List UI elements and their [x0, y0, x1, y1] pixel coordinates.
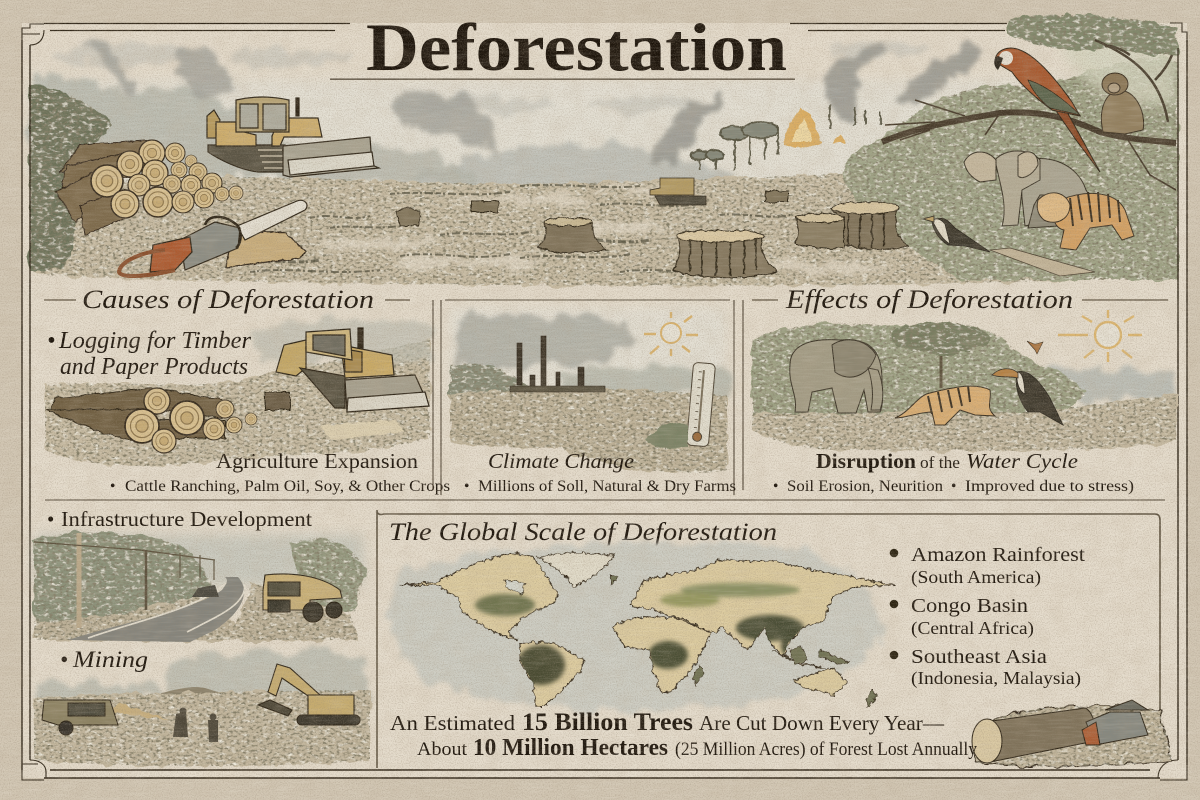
ripper: [207, 110, 220, 138]
arm: [268, 664, 320, 700]
crawler: [297, 715, 360, 725]
stump: centre: [538, 222, 606, 253]
beak: [994, 56, 1003, 70]
haze trees: [290, 143, 480, 182]
climate heading: Climate Change: [488, 449, 634, 473]
macaw on branch: [882, 48, 1176, 190]
tiger: [1037, 192, 1134, 250]
hotspot: congo: (Central Africa): [911, 618, 1034, 639]
hazy quarry wall: [36, 651, 368, 700]
jeep: [42, 700, 118, 735]
bar: [237, 200, 307, 240]
branch: [882, 112, 1176, 143]
butterfly: [1027, 341, 1043, 354]
panel: infrastructure development: [34, 507, 366, 642]
utility poles: [34, 533, 215, 628]
forest cover: [475, 583, 809, 685]
hotspot: congo: Congo Basin: [911, 595, 1028, 617]
climate details: Millions of Soll, Natural & Dry Farms: [478, 478, 736, 495]
burnt tree line: [691, 105, 880, 170]
dark brush scribbles: [230, 185, 790, 273]
scorched ground: [450, 389, 727, 473]
water cycle heading: of the: [920, 453, 960, 472]
bottom border: [44, 770, 1160, 778]
workers: [173, 708, 218, 742]
toucan: [992, 369, 1063, 425]
water cycle heading: Disruption: [816, 449, 916, 473]
corner top-left: [22, 24, 44, 45]
smoke plumes left: [85, 40, 495, 155]
bark lines: [848, 212, 884, 248]
statistic line one: 15 Billion Trees: [522, 709, 693, 736]
right forest: [843, 58, 1178, 280]
road lines: [88, 583, 245, 638]
panel: climate change: [450, 308, 736, 495]
logs: [46, 388, 257, 453]
land masses: [400, 553, 895, 707]
distant hills centre: [380, 143, 760, 190]
smoke plumes centre: [650, 42, 985, 165]
ground tuft: [975, 706, 1172, 766]
continents: [400, 552, 895, 707]
canopy top right: [1008, 15, 1178, 56]
panel: global scale of deforestation: [377, 510, 1172, 768]
wing: [1028, 80, 1080, 115]
blade: [345, 375, 429, 412]
top border left: [44, 24, 350, 30]
water cycle heading: Water Cycle: [966, 449, 1078, 473]
factory: [510, 336, 605, 392]
log pile: [56, 140, 243, 235]
smog: [452, 312, 640, 365]
hudson bay: [505, 580, 525, 595]
wildfire: [784, 108, 846, 147]
ground: [32, 172, 1176, 286]
greenland: [538, 552, 615, 587]
statistic line two: About: [417, 739, 468, 760]
agriculture heading: Agriculture Expansion: [216, 449, 418, 473]
logging scene ground: [45, 340, 430, 466]
log bodies: [46, 388, 225, 443]
hotspot: congo: [890, 595, 1034, 639]
fallen log: [990, 248, 1095, 276]
scrub: [752, 324, 1085, 424]
mining ground: [34, 690, 370, 766]
pale clearing in forest: [1060, 35, 1176, 105]
statistic line two: (25 Million Acres) of Forest Lost Annually: [675, 739, 977, 760]
stump: foreground big: [673, 236, 777, 278]
logging label: •: [47, 328, 55, 354]
heading rules: [44, 299, 410, 301]
bulldozer: [276, 328, 429, 412]
mining label: •: [60, 647, 68, 672]
corner bottom-right: [1158, 760, 1187, 780]
distant bulldozer: [650, 178, 706, 205]
light soil patches: [320, 186, 890, 274]
dump truck: [263, 574, 342, 622]
water cycle details: Soil Erosion, Neurition: [787, 478, 943, 495]
engine: [341, 345, 394, 378]
section rules: [45, 300, 1165, 500]
forest left of road: [34, 532, 215, 625]
statistic line two: 10 Million Hectares: [473, 735, 668, 761]
mining label: Mining: [72, 647, 148, 672]
forest right of road: [290, 538, 366, 612]
panel: effects of deforestation: [752, 285, 1176, 495]
hazy background: [35, 535, 363, 585]
sun: [1058, 310, 1142, 362]
perched bird: [923, 216, 990, 252]
log ends: [125, 388, 257, 453]
exhaust: [358, 328, 363, 348]
canopy trunk: [1095, 40, 1172, 122]
haze behind bulldozer: [250, 320, 432, 360]
orange cover: [150, 237, 192, 272]
panorama: cleared forest landscape: [30, 15, 1178, 286]
scene sky: [450, 308, 726, 398]
distant hills left: [30, 72, 300, 178]
acacia tree: [893, 322, 989, 388]
panel: mining: [34, 647, 370, 766]
title: Deforestation: [366, 9, 787, 85]
thermometer: [686, 362, 716, 447]
infrastructure label: •: [47, 507, 54, 531]
spoil heap: [140, 687, 260, 712]
statistic line one: An Estimated: [390, 711, 516, 735]
agriculture details: Cattle Ranching, Palm Oil, Soy, & Other Crops: [125, 478, 450, 495]
corner bottom-left: [22, 760, 46, 780]
face: [999, 51, 1013, 65]
body: [216, 118, 322, 146]
left border: [22, 40, 30, 770]
elephant: [964, 151, 1090, 228]
cab and engine: [308, 695, 354, 715]
panel heading: The Global Scale of Deforestation: [389, 519, 777, 546]
pipe rail: [510, 386, 605, 392]
road: [68, 577, 244, 642]
islands: [610, 575, 877, 707]
logging label: Logging for Timber: [58, 328, 252, 354]
panel: causes of deforestation: [44, 285, 450, 495]
soil rocks: [320, 420, 405, 440]
monkey: [1101, 73, 1144, 134]
water cycle details: •: [951, 478, 956, 495]
plant: [530, 367, 584, 392]
tiger: [895, 386, 995, 425]
tail: [1052, 105, 1100, 172]
bark lines: [690, 240, 756, 276]
corner top-right: [1170, 23, 1187, 42]
hotspot: amazon: Amazon Rainforest: [911, 544, 1085, 566]
exhaust: [296, 98, 299, 116]
panel frame: [377, 510, 1160, 768]
body: [995, 48, 1080, 116]
log end: [972, 719, 1002, 763]
haze: [1010, 367, 1176, 400]
hotspot: amazon: [890, 544, 1085, 588]
sky: [34, 80, 1174, 190]
heading: effects: Effects of Deforestation: [785, 285, 1073, 314]
elephant: [790, 340, 883, 413]
chainsaw orange cover: [1082, 722, 1100, 745]
cab: [306, 329, 352, 360]
water cycle details: •: [773, 478, 778, 495]
top handle: [205, 217, 241, 248]
heading rules: [752, 299, 1168, 301]
tracks: [208, 145, 285, 172]
bucket: [258, 700, 292, 716]
heading: causes: Causes of Deforestation: [82, 285, 374, 314]
climate details: •: [464, 478, 469, 495]
chimneys: [517, 336, 546, 388]
foreground cut log and chainsaw: [972, 700, 1172, 766]
stump: right rear: [832, 208, 908, 250]
ground: [752, 395, 1176, 451]
agriculture details: •: [110, 478, 115, 495]
chainsaw housing: [1086, 712, 1148, 745]
cab: [236, 97, 289, 132]
log bodies: [56, 140, 152, 235]
tree stumps: [396, 191, 908, 278]
twigs: [885, 100, 1176, 190]
statistic line one: Are Cut Down Every Year—: [699, 711, 945, 735]
wilted plant: [645, 423, 688, 449]
distant hills: [560, 368, 727, 395]
log ends: [91, 140, 243, 218]
hotspot: amazon: (South America): [911, 567, 1041, 588]
track steps: [258, 150, 284, 168]
excavator: [258, 664, 360, 725]
scrub: [450, 364, 540, 400]
right border: [1178, 40, 1187, 765]
top border right: [790, 24, 1007, 30]
cut stump under saw: [226, 232, 306, 267]
shoulder ground: [34, 582, 360, 640]
small stump: [265, 392, 290, 410]
sun: [644, 312, 698, 356]
infrastructure label: Infrastructure Development: [61, 507, 312, 531]
title underline: [330, 78, 795, 80]
logging label: and Paper Products: [60, 354, 248, 380]
hotspot: southeast asia: [890, 646, 1081, 689]
chainsaw: [119, 200, 307, 276]
hotspot: southeast asia: Southeast Asia: [911, 646, 1047, 668]
car: [192, 585, 219, 597]
world map: [392, 543, 895, 709]
tan spoil track: [110, 703, 170, 720]
chainsaw top: [1105, 700, 1148, 710]
log body: [985, 708, 1095, 762]
bulldozer: [207, 97, 379, 177]
handle: [119, 250, 175, 276]
rear ripper: [276, 340, 306, 376]
engine housing: [180, 222, 240, 270]
clouds: [50, 42, 930, 113]
hotspot: southeast asia: (Indonesia, Malaysia): [911, 668, 1081, 689]
blade: [283, 137, 379, 177]
water cycle details: Improved due to stress): [965, 478, 1134, 495]
hotspot list: [890, 544, 1085, 689]
track: [300, 368, 345, 408]
ocean wash: [392, 543, 880, 709]
stump: right middle: [795, 217, 844, 248]
small stumps: [396, 191, 788, 226]
left foliage: [30, 85, 112, 270]
